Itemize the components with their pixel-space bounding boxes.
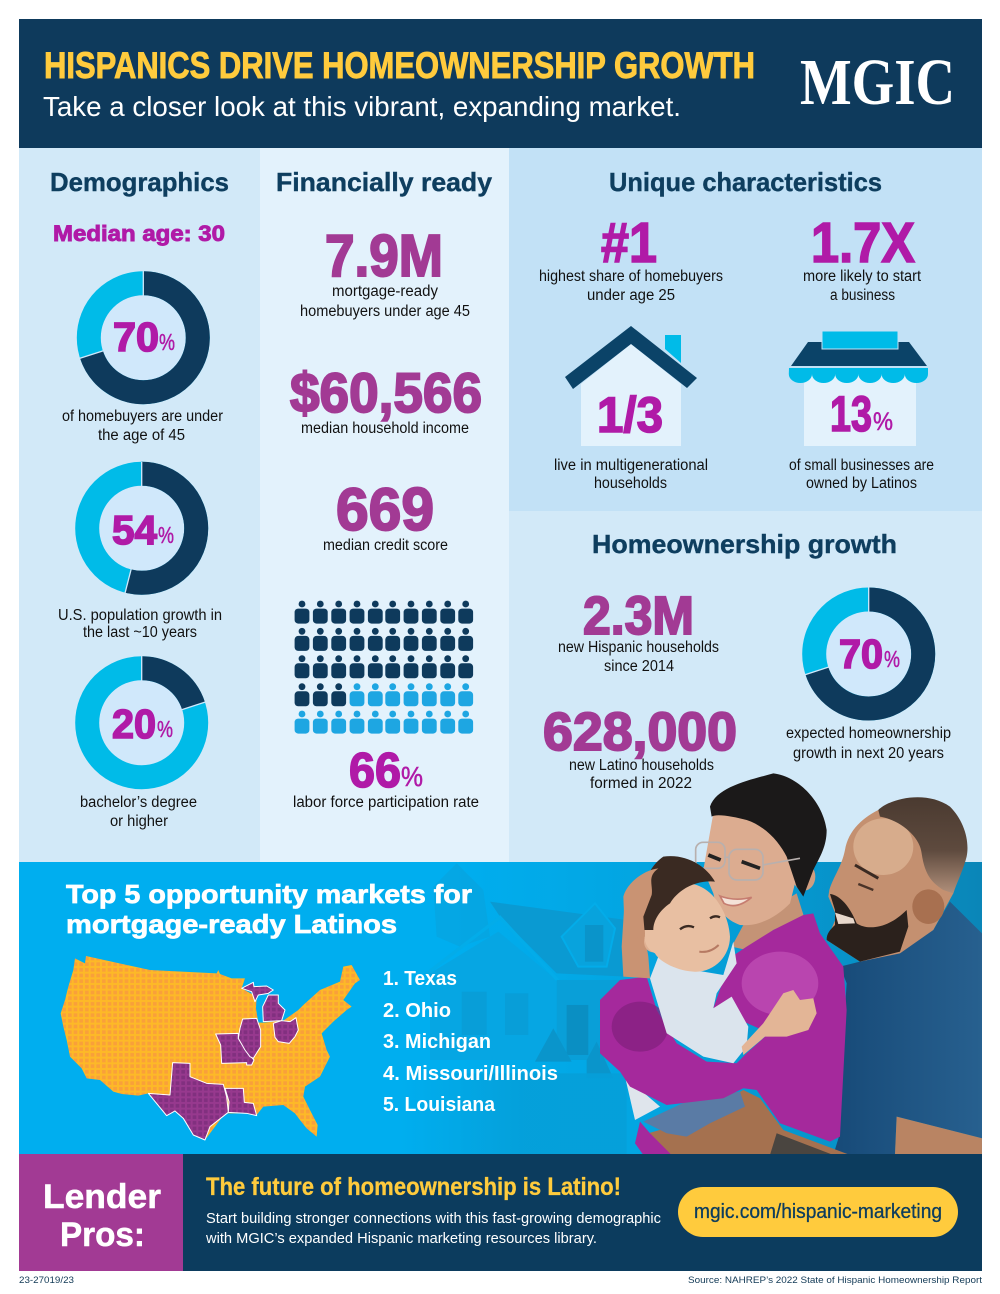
panel: homeownership growth	[509, 511, 982, 862]
title: HISPANICS DRIVE HOMEOWNERSHIP GROWTH	[44, 45, 755, 86]
caption: expected homeownership	[786, 725, 951, 742]
stat: number one: highest share of homebuyers	[539, 268, 723, 285]
footer body text	[205, 1210, 661, 1247]
purple blouse	[600, 913, 847, 1155]
donut chart: 54 percent: %	[158, 522, 174, 548]
map: United States	[61, 956, 360, 1140]
caption	[554, 457, 708, 492]
stat: labor force: %	[401, 761, 423, 792]
icon: storefront with 13 percent: 13	[830, 386, 872, 442]
button: website link	[678, 1187, 958, 1237]
state: Louisiana	[225, 1088, 257, 1116]
background photo: house	[400, 863, 627, 1155]
stat: credit score	[323, 476, 448, 554]
stat: 628,000: 628,000	[543, 702, 737, 762]
panel: opportunity markets	[19, 862, 982, 1155]
icon: house with one third	[565, 326, 697, 446]
donut chart: 20 percent: 20	[112, 701, 156, 747]
caption	[80, 794, 197, 830]
list: top five markets: 5. Louisiana	[383, 1094, 496, 1116]
list: top five markets: 1. Texas	[383, 968, 457, 990]
heading: unique characteristics: Unique characteristics	[609, 167, 882, 197]
caption: live in multigenerational	[554, 457, 708, 474]
caption: of homebuyers are under	[62, 408, 223, 425]
stat: 7.9M: mortgage-ready	[332, 283, 438, 300]
donut chart: 20 percent	[87, 656, 205, 777]
caption	[58, 607, 222, 641]
stat: 2.3M: new Hispanic households	[558, 639, 719, 656]
label: lender pros: Lender	[43, 1178, 161, 1216]
caption: the age of 45	[98, 427, 185, 444]
stat: 2.3M: 2.3M	[583, 586, 694, 646]
stat: number one	[539, 211, 723, 304]
stat: 1.7X: 1.7X	[811, 211, 915, 275]
caption	[786, 725, 951, 762]
stat: number one: #1	[601, 211, 657, 275]
stat: credit score: median credit score	[323, 537, 448, 554]
donut chart: 70 percent: 70	[113, 314, 159, 360]
donut chart: 70 percent: %	[159, 329, 175, 355]
state: Illinois	[238, 1018, 261, 1058]
list: top five markets: 4. Missouri/Illinois	[383, 1063, 558, 1085]
state: Michigan	[242, 982, 285, 1022]
state: Texas	[148, 1063, 228, 1140]
stat: income: $60,566	[290, 361, 482, 424]
caption: households	[594, 475, 667, 492]
icon: storefront with 13 percent	[789, 331, 928, 446]
logo: MGIC: MGIC	[800, 46, 955, 119]
footer body text: Start building stronger connections with this fast-growing demographic	[206, 1210, 661, 1227]
caption: or higher	[110, 813, 168, 830]
stat: labor force: 66	[349, 744, 401, 798]
heading: demographics: Demographics	[50, 167, 229, 197]
heading: top 5 markets: Top 5 opportunity markets for	[66, 879, 472, 909]
woman	[696, 773, 827, 950]
heading: financially ready: Financially ready	[276, 167, 493, 197]
footer body text: with MGIC’s expanded Hispanic marketing resources library.	[205, 1230, 597, 1247]
list: top five markets: 3. Michigan	[383, 1031, 491, 1053]
panel: demographics	[19, 148, 260, 862]
state: Ohio	[273, 1018, 298, 1043]
stat: 2.3M	[558, 586, 719, 675]
stat: credit score: 669	[336, 476, 434, 543]
photo: family	[600, 773, 982, 1155]
icon: storefront with 13 percent: %	[873, 408, 893, 436]
stat: 1.7X: a business	[830, 287, 895, 304]
baby's arm	[742, 990, 817, 1055]
baby's legs	[625, 1077, 745, 1137]
stat: labor force	[293, 744, 479, 811]
subtitle: Take a closer look at this vibrant, expanding market.	[43, 91, 681, 122]
stat: 7.9M	[300, 223, 470, 320]
icon: house with one third: 1/3	[597, 387, 663, 443]
caption: growth in next 20 years	[793, 745, 944, 762]
heading: top 5 markets	[66, 879, 472, 939]
caption	[789, 457, 934, 492]
list: top five markets	[383, 968, 558, 1116]
panel: lender pros footer	[19, 1154, 982, 1271]
panel: unique characteristics	[509, 148, 982, 511]
baby's head	[641, 856, 730, 972]
stat: number one: under age 25	[587, 287, 675, 304]
stat: 628,000	[543, 702, 737, 792]
panel: financially ready	[260, 148, 509, 862]
stat: 7.9M: homebuyers under age 45	[300, 303, 470, 320]
stat: 7.9M: 7.9M	[325, 223, 443, 289]
donut chart: 54 percent: 54	[112, 507, 157, 553]
woman's forearm	[622, 910, 650, 978]
caption: owned by Latinos	[806, 475, 917, 492]
button: website link: mgic.com/hispanic-marketing	[694, 1201, 942, 1223]
man's hand	[648, 1090, 850, 1155]
donut chart: 70 percent growth: 70	[839, 631, 883, 677]
caption: U.S. population growth in	[58, 607, 222, 624]
donut chart: 70 percent growth: %	[884, 646, 900, 672]
stat: 628,000: formed in 2022	[590, 775, 692, 792]
caption: of small businesses are	[789, 457, 934, 474]
donut chart: 70 percent growth	[805, 587, 923, 708]
source note: Source: NAHREP’s 2022 State of Hispanic Homeownership Report	[688, 1275, 982, 1286]
baby's shirt	[650, 942, 748, 1063]
woman's fingers	[623, 868, 658, 940]
man	[827, 797, 982, 1155]
donut chart: 20 percent: %	[157, 716, 173, 742]
state: Missouri	[216, 1033, 254, 1065]
stat: 1.7X: more likely to start	[803, 268, 922, 285]
stat: 1.7X	[803, 211, 922, 304]
caption	[62, 408, 223, 444]
pictogram: 66 of 100 people	[295, 601, 473, 734]
stat: 2.3M: since 2014	[604, 658, 674, 675]
heading: homeownership growth: Homeownership growth	[592, 529, 897, 559]
stat: income: median household income	[301, 420, 469, 437]
stat: 628,000: new Latino households	[569, 757, 714, 774]
footer headline: The future of homeownership is Latino!	[206, 1173, 621, 1201]
heading: top 5 markets: mortgage-ready Latinos	[66, 909, 397, 939]
median age callout: Median age: 30	[53, 221, 225, 246]
caption: the last ~10 years	[83, 624, 197, 641]
panel: header	[19, 19, 982, 148]
stat: labor force: labor force participation rate	[293, 794, 479, 811]
list: top five markets: 2. Ohio	[383, 1000, 451, 1022]
document code: 23-27019/23	[19, 1275, 74, 1286]
donut chart: 54 percent	[87, 462, 196, 593]
donut chart: 70 percent	[80, 271, 198, 392]
caption: bachelor’s degree	[80, 794, 197, 811]
label: lender pros: Pros:	[60, 1216, 145, 1254]
label: lender pros	[19, 1154, 183, 1271]
